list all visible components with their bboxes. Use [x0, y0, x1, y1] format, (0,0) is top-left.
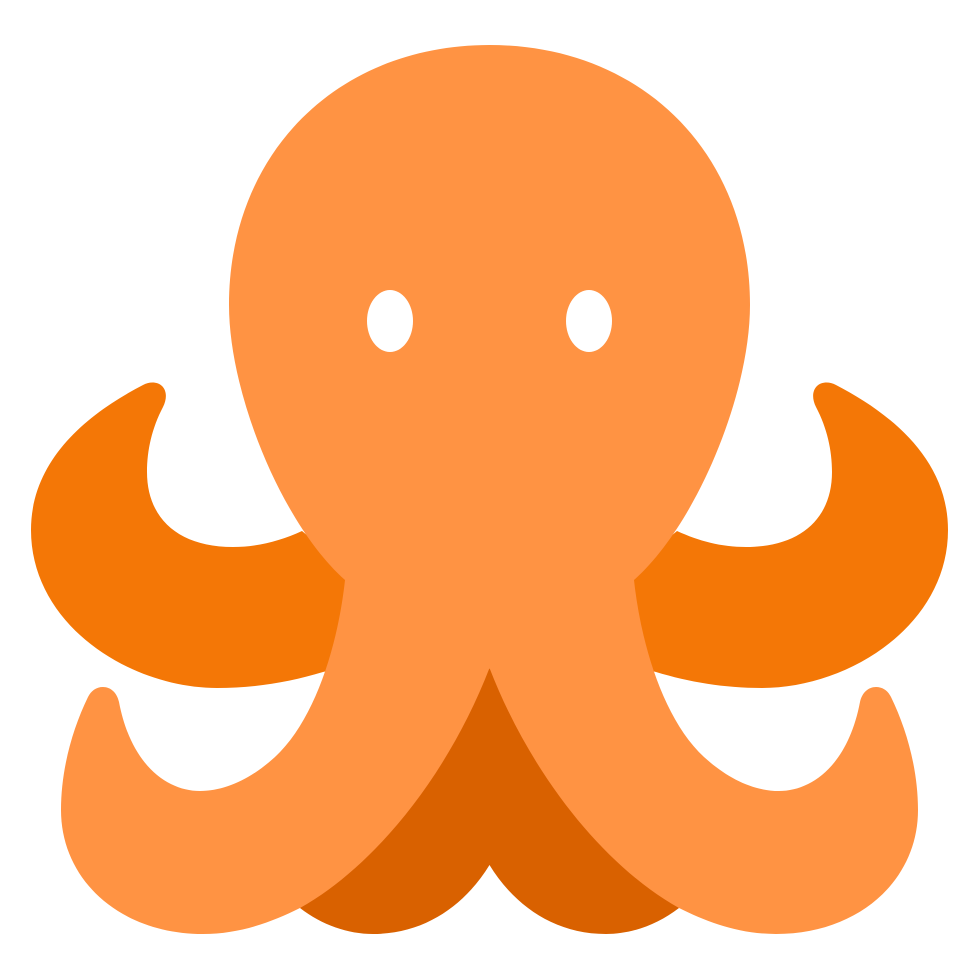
left eye — [367, 290, 413, 352]
center back tentacles — [300, 668, 679, 934]
right middle tentacle — [619, 382, 948, 688]
left middle tentacle — [31, 382, 360, 688]
head and front tentacles — [61, 45, 918, 934]
right eye — [566, 290, 612, 352]
